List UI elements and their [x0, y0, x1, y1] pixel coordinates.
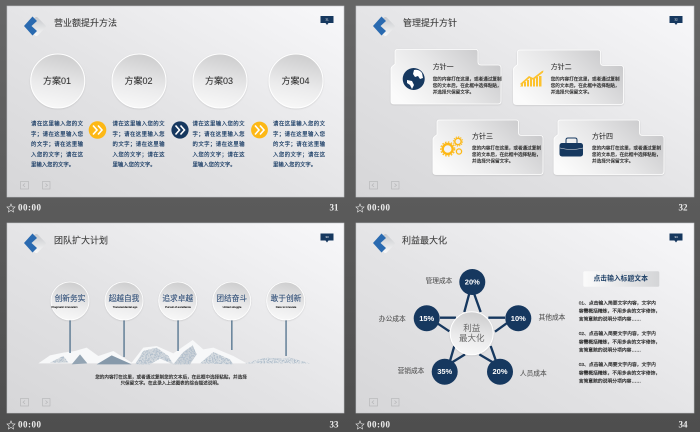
plan circle 03	[193, 54, 247, 108]
page badge	[670, 16, 682, 25]
stem and circle 3	[159, 282, 197, 351]
text block 3: 入您的文字；请在这	[192, 150, 245, 158]
plan circle 01: 方案01	[43, 75, 71, 86]
text block 2: 里输入您的文字。	[112, 160, 156, 168]
center circle: 利益	[463, 323, 481, 333]
footer: slide 32 timer: 00:00	[367, 202, 390, 212]
card description: 您的文本后，在此框中选择粘贴，	[433, 81, 502, 88]
stem and circle 5: Dare to innovate	[276, 305, 297, 309]
text block 3: 的文字；请在这里输	[192, 140, 245, 148]
footer: slide 33 timer: 00:00	[18, 420, 42, 430]
card description: 您的文本后，在此框中选择粘贴，	[551, 81, 620, 88]
icon: globe	[403, 68, 425, 90]
card description: 并选择只保留文字。	[551, 88, 592, 95]
page badge: 32	[674, 18, 678, 22]
panel: slide 31	[7, 6, 344, 197]
heading: 管理提升方针	[403, 17, 457, 28]
title box: 点击输入标题文本	[594, 274, 648, 282]
stem and circle 5	[267, 282, 305, 356]
plan circle 03: 方案03	[205, 75, 233, 86]
list item 02: 言简意赅的说明分项内容……	[579, 346, 641, 353]
card description: 您的内容打在这里，或者通过复制	[433, 75, 502, 82]
card description: 您的文本后，在此框中选择粘贴，	[472, 151, 541, 158]
page badge: 33	[325, 235, 329, 239]
card: 方针四	[554, 120, 664, 174]
arrow: yellow 1	[89, 121, 106, 139]
nav buttons	[370, 182, 399, 189]
stem and circle 3: Pursuit of excellence	[165, 305, 191, 309]
page badge	[670, 234, 682, 242]
nav buttons	[370, 398, 399, 406]
list item 02: 02、点击输入简要文字内容，文字内	[579, 330, 656, 336]
card: 方针二	[514, 50, 624, 104]
page badge	[320, 16, 334, 25]
footer: slide 33 timer	[7, 420, 42, 430]
text block 2: 字；请在这里输入您	[112, 130, 165, 138]
page badge	[320, 234, 334, 242]
node: 营销成本 35%	[398, 359, 458, 385]
node: 营销成本 35%: 营销成本	[398, 366, 425, 375]
icon: briefcase	[560, 138, 583, 156]
footer: slide 31 timer: 00:00	[18, 202, 42, 212]
slide 33 sheet	[7, 223, 344, 413]
node: 办公成本 15%	[379, 305, 440, 331]
stem and circle 1: 创新务实	[55, 293, 86, 303]
heading: 利益最大化	[402, 234, 447, 246]
stem and circle 5: 敢于创新	[271, 293, 302, 303]
footer: slide 34 timer	[356, 420, 390, 430]
stem and circle 2: 超越自我	[109, 293, 140, 303]
connector lines	[437, 293, 507, 363]
card text: 方针二	[551, 62, 572, 71]
text block 4: 字；请在这里输入您	[273, 130, 326, 138]
card description: 您的内容打在这里，或者通过复制	[551, 75, 620, 82]
footer: slide 31 timer	[7, 202, 42, 212]
text block 1: 入您的文字；请在这	[31, 150, 84, 158]
slide 32 sheet	[356, 6, 694, 197]
text block 3: 请在这里输入您的文	[192, 120, 245, 128]
mountains	[38, 340, 310, 364]
list item 01: 容需概括精炼，不用多余的文字修饰，	[579, 307, 660, 314]
heading: 团队扩大计划	[54, 234, 108, 246]
card description: 并选择只保留文字。	[433, 88, 474, 95]
text block 2: 的文字；请在这里输	[112, 140, 165, 148]
nav buttons	[20, 182, 50, 189]
footer: slide 32 timer	[356, 202, 390, 212]
stem and circle 4: 团结奋斗	[216, 293, 247, 303]
card: 方针一	[391, 50, 502, 104]
text block 4: 请在这里输入您的文	[273, 120, 326, 128]
text block 1: 的文字；请在这里输	[31, 140, 84, 148]
card description: 并选择只保留文字。	[592, 157, 633, 164]
text block 2: 请在这里输入您的文	[112, 120, 165, 128]
card text: 方针一	[433, 62, 454, 71]
footer: slide 32 number: 32	[678, 202, 688, 212]
plan circle 02: 方案02	[124, 75, 153, 86]
center circle	[450, 312, 493, 355]
stem and circle 1: Pragmatic innovation	[51, 305, 78, 309]
node: 管理成本 20%: 管理成本	[426, 276, 453, 285]
heading: 营业额提升方法	[54, 17, 117, 28]
node: 人员成本 20%: 20%	[492, 367, 508, 376]
list item 03: 言简意赅的说明分项内容……	[579, 377, 641, 384]
description: 只保留文字。在此录入上述图表的综合描述说明。	[120, 379, 222, 386]
title box	[583, 271, 659, 287]
nav buttons	[20, 398, 50, 406]
text block 3: 字；请在这里输入您	[192, 130, 245, 138]
plan circle 04: 方案04	[281, 75, 310, 86]
node: 人员成本 20%	[487, 359, 547, 385]
node: 管理成本 20%	[426, 269, 485, 295]
card text: 方针四	[592, 132, 613, 140]
card description: 您的内容打在这里，或者通过复制	[592, 144, 661, 151]
text block 4: 里输入您的文字。	[273, 160, 316, 168]
text block 2: 入您的文字；请在这	[112, 150, 165, 158]
stem and circle 4: United struggle	[223, 305, 242, 309]
center circle: 最大化	[459, 333, 485, 343]
text block 1: 请在这里输入您的文	[31, 120, 84, 128]
node: 其他成本 10%: 10%	[511, 314, 526, 323]
description: 您的内容打在这里，或者通过复制您的文本后，在此框中选择粘贴，并选择	[95, 373, 247, 380]
list item 03: 容需概括精炼，不用多余的文字修饰，	[579, 369, 660, 376]
text block 4: 的文字；请在这里输	[273, 140, 326, 148]
node: 管理成本 20%: 20%	[465, 278, 480, 286]
card description: 您的文本后，在此框中选择粘贴，	[592, 151, 661, 158]
stem and circle 1	[51, 282, 89, 353]
stem and circle 3: 追求卓越	[162, 293, 193, 303]
icon: gears	[441, 137, 463, 156]
list item 01: 01、点击输入简要文字内容，文字内	[579, 299, 656, 306]
stem and circle 4	[213, 282, 251, 350]
node: 办公成本 15%: 15%	[419, 314, 435, 323]
node: 办公成本 15%: 办公成本	[379, 314, 406, 323]
plan circle 04	[269, 54, 323, 108]
icon: back chevron	[373, 16, 396, 37]
node: 其他成本 10%: 其他成本	[539, 312, 566, 322]
card text: 方针三	[472, 132, 493, 140]
icon: back chevron	[24, 16, 47, 37]
list item 03: 03、点击输入简要文字内容，文字内	[579, 360, 656, 368]
panel: slide 32	[356, 6, 694, 197]
arrow: navy	[171, 121, 189, 139]
footer: slide 31 number: 31	[330, 202, 339, 212]
page badge: 34	[674, 235, 678, 239]
page badge: 31	[325, 18, 329, 22]
slide 34 sheet	[356, 223, 694, 413]
arrow: yellow 2	[251, 122, 268, 138]
card: 方针三	[433, 120, 543, 174]
panel: slide 34	[356, 223, 694, 413]
node: 人员成本 20%: 人员成本	[520, 368, 547, 378]
plan circle 02	[112, 54, 166, 108]
footer: slide 33 number: 33	[330, 420, 339, 430]
stem and circle 2	[105, 282, 143, 357]
card description: 并选择只保留文字。	[472, 157, 513, 164]
footer: slide 34 number: 34	[678, 420, 688, 430]
text block 4: 入您的文字；请在这	[273, 150, 326, 158]
icon: back chevron	[24, 233, 47, 254]
stem and circle 2: Transcendental ego	[113, 305, 138, 309]
card description: 您的内容打在这里，或者通过复制	[472, 144, 541, 151]
panel: slide 33	[7, 223, 344, 413]
icon: back chevron	[373, 233, 396, 254]
list item 01: 言简意赅的说明分项内容……	[579, 315, 641, 322]
slide 31 sheet	[7, 6, 344, 197]
node: 营销成本 35%: 35%	[437, 367, 453, 376]
list item 02: 容需概括精炼，不用多余的文字修饰，	[579, 338, 660, 345]
node: 其他成本 10%	[505, 305, 566, 331]
plan circle 01	[31, 54, 85, 108]
text block 1: 里输入您的文字。	[31, 160, 74, 168]
icon: rising bars	[520, 70, 544, 86]
footer: slide 34 timer: 00:00	[367, 420, 390, 430]
text block 3: 里输入您的文字。	[192, 160, 236, 168]
text block 1: 字；请在这里输入您	[31, 130, 84, 138]
